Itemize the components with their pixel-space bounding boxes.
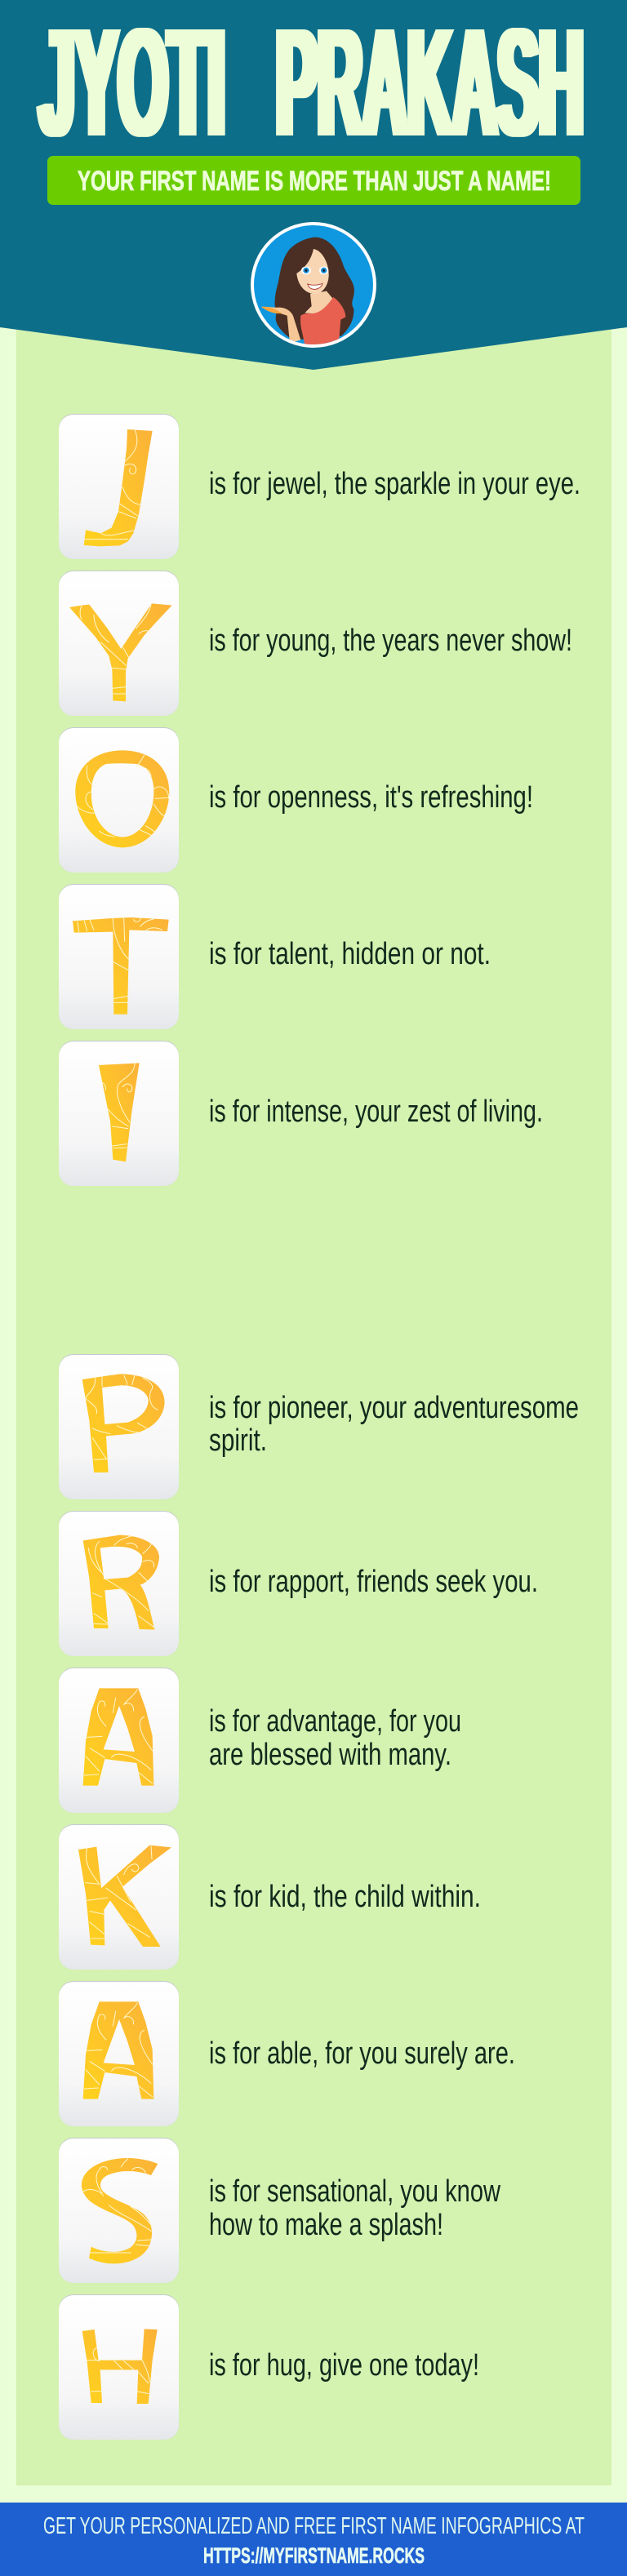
letter J xyxy=(84,429,153,546)
card P xyxy=(59,1354,179,1499)
card A xyxy=(59,1668,179,1813)
card Y xyxy=(59,571,179,716)
row: K xyxy=(59,1824,481,1970)
text S second line: how to make a splash! xyxy=(209,2208,443,2242)
subtitle bar xyxy=(47,156,580,205)
letter Y xyxy=(69,603,172,701)
letter A xyxy=(83,1688,153,1786)
letter T xyxy=(73,917,169,1015)
text A second line: are blessed with many. xyxy=(209,1738,451,1772)
letter I xyxy=(99,1063,140,1161)
letter A second xyxy=(83,2001,153,2099)
text T: is for talent, hidden or not. xyxy=(209,937,491,971)
row: A xyxy=(59,1668,461,1813)
row: S xyxy=(59,2138,500,2283)
card R xyxy=(59,1511,179,1656)
text H: is for hug, give one today! xyxy=(209,2348,479,2383)
card I xyxy=(59,1041,179,1186)
row: I xyxy=(59,1041,543,1186)
text S: is for sensational, you know xyxy=(209,2174,500,2209)
row: J xyxy=(59,414,580,559)
letter R xyxy=(83,1535,159,1630)
footer xyxy=(0,2503,627,2576)
letter O xyxy=(75,750,169,847)
row: R xyxy=(59,1511,538,1656)
row: P xyxy=(59,1354,579,1499)
footer link: HTTPS://MYFIRSTNAME.ROCKS xyxy=(203,2543,425,2568)
card J xyxy=(59,414,179,559)
card S xyxy=(59,2138,179,2283)
row: O xyxy=(59,727,533,873)
header banner xyxy=(0,0,627,370)
text K: is for kid, the child within. xyxy=(209,1880,481,1914)
letter S xyxy=(82,2158,158,2263)
letter P xyxy=(82,1374,165,1472)
card T xyxy=(59,884,179,1029)
row: A second xyxy=(59,1981,515,2126)
text O: is for openness, it's refreshing! xyxy=(209,780,533,815)
card H xyxy=(59,2294,179,2440)
text A second: is for able, for you surely are. xyxy=(209,2036,515,2071)
card A second xyxy=(59,1981,179,2126)
row: T xyxy=(59,884,491,1029)
title: JYOTI xyxy=(39,0,225,169)
letter H xyxy=(82,2329,158,2404)
row: H xyxy=(59,2294,479,2440)
text A: is for advantage, for you xyxy=(209,1704,461,1739)
text R: is for rapport, friends seek you. xyxy=(209,1565,538,1599)
letter K xyxy=(78,1845,171,1947)
card O xyxy=(59,727,179,873)
card K xyxy=(59,1824,179,1970)
icon: avatar woman in circle xyxy=(251,222,376,348)
text P second line: spirit. xyxy=(209,1423,267,1458)
row: Y xyxy=(59,571,572,716)
